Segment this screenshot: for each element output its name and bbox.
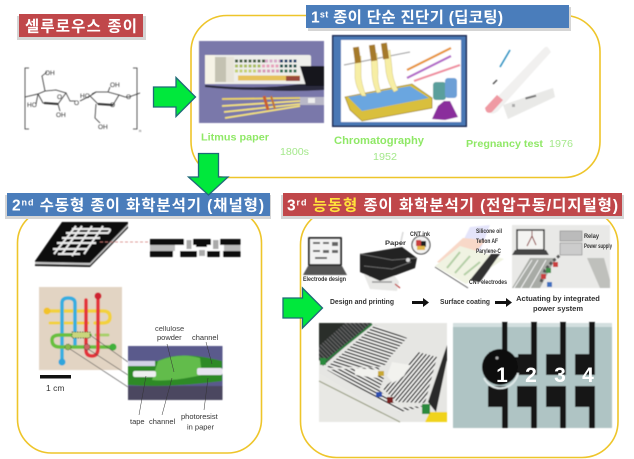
arrow: design to coating — [412, 298, 429, 307]
micrograph callouts — [130, 324, 219, 432]
icon: cellulose chemical structure: O — [57, 94, 62, 101]
arrow: second generation to third generation — [283, 288, 322, 328]
heading: 1st generation: st — [320, 10, 328, 20]
photo: printed electrode array — [319, 323, 447, 422]
photo: digital droplet electrodes numbered 1 to 4: 3 — [554, 364, 566, 387]
photo: integrated power system — [512, 225, 610, 288]
step label: actuating by integrated power system — [516, 294, 600, 313]
image: channel micrograph — [128, 346, 222, 400]
label: CNT ink: CNT ink — [410, 232, 431, 238]
heading: 1st generation — [306, 5, 571, 31]
step label: actuating by integrated power system: Actuating by integrated — [516, 294, 600, 303]
heading: 3rd generation: 종이 화학분석기 (전압구동/디지털형) — [358, 196, 618, 214]
caption: chromatography: Chromatography — [334, 135, 425, 147]
icon: cellulose chemical structure: OH — [98, 124, 108, 131]
heading: 2nd generation: 수동형 종이 화학분석기 (채널형) — [34, 196, 264, 214]
step label: surface coating: Surface coating — [440, 297, 490, 306]
photo: digital droplet electrodes numbered 1 to 4: 1 — [496, 364, 508, 387]
micrograph callouts: cellulose — [155, 324, 184, 333]
heading: 2nd generation: 2 — [12, 198, 21, 214]
image: pregnancy test — [485, 47, 555, 119]
micrograph callouts: photoresist — [181, 412, 219, 421]
panel: 2nd generation passive channel analyzer — [18, 209, 262, 453]
label: silicone oil: Silicone oil — [476, 229, 502, 235]
photo: digital droplet electrodes numbered 1 to 4 — [453, 322, 612, 428]
icon: cellulose chemical structure: O — [126, 94, 131, 101]
heading: 2nd generation — [5, 193, 271, 219]
label: Teflon AF: Teflon AF — [476, 239, 498, 245]
heading: 3rd generation — [281, 193, 624, 219]
label: power supply: Power supply — [584, 244, 612, 250]
icon: cellulose chemical structure: n — [139, 128, 141, 133]
micrograph callouts: powder — [157, 333, 182, 342]
scale bar: 1 cm: 1 cm — [46, 383, 64, 393]
heading: 3rd generation: 3 — [287, 198, 296, 214]
step label: actuating by integrated power system: power system — [533, 304, 583, 313]
label: paper: Paper — [385, 241, 407, 247]
arrow: cellulose to first generation — [154, 78, 196, 116]
icon: cellulose chemical structure: OH — [110, 82, 120, 89]
icon: cellulose chemical structure: HO — [80, 93, 90, 100]
micrograph callouts: tape — [130, 417, 145, 426]
panel: 1st generation simple paper diagnostics — [191, 16, 600, 178]
icon: cellulose chemical structure: OH — [45, 70, 55, 77]
arrow: first generation to second generation — [188, 154, 228, 195]
heading: 3rd generation: 능동형 — [307, 196, 357, 214]
step label: design and printing: Design and printing — [330, 297, 394, 306]
label: CNT electrodes: CNT electrodes — [469, 280, 508, 286]
label: relay: Relay — [584, 234, 600, 240]
label: electrode design: Electrode design — [303, 277, 346, 283]
micrograph callouts: in paper — [187, 422, 215, 432]
heading: 1st generation: 1 — [311, 10, 320, 26]
heading: cellulose paper — [17, 14, 146, 40]
photo: digital droplet electrodes numbered 1 to 4: 2 — [525, 364, 537, 387]
diagram: channel cross section — [150, 239, 240, 257]
heading: 2nd generation: nd — [22, 198, 33, 208]
diagram: layered paper device — [35, 222, 150, 267]
caption: litmus paper: Litmus paper — [201, 132, 269, 144]
illustration: inkjet printer — [360, 232, 430, 291]
heading: 1st generation: 종이 단순 진단기 (딥코팅) — [328, 8, 503, 26]
heading: cellulose paper: 셀루로우스 종이 — [25, 18, 137, 36]
icon: cellulose chemical structure: O — [110, 102, 115, 109]
photo: digital droplet electrodes numbered 1 to 4: 4 — [582, 364, 594, 387]
arrow: coating to actuating — [495, 298, 512, 307]
icon: cellulose chemical structure: OH — [56, 112, 66, 119]
icon: cellulose chemical structure: O — [74, 100, 79, 107]
caption: 1952: 1952 — [373, 152, 397, 163]
micrograph callouts: channel — [192, 333, 219, 342]
caption: 1976: 1976 — [549, 139, 573, 150]
icon: cellulose chemical structure: HO — [27, 102, 37, 109]
illustration: laptop with electrode design — [303, 237, 347, 275]
heading: 3rd generation: rd — [297, 198, 306, 208]
scale bar: 1 cm — [40, 375, 71, 393]
panel: 3rd generation active digital analyzer — [300, 209, 618, 458]
image: chromatography illustration — [332, 35, 467, 127]
micrograph callouts: channel — [149, 417, 176, 426]
label: Parylene-C: Parylene-C — [476, 249, 502, 255]
image: paper microfluidic device — [39, 287, 128, 387]
icon: cellulose chemical structure — [25, 68, 141, 133]
caption: 1800s: 1800s — [280, 147, 309, 158]
caption: pregnancy test: Pregnancy test — [466, 138, 544, 150]
illustration: coated layers with CNT electrodes — [435, 225, 504, 288]
image: litmus paper — [199, 41, 324, 123]
